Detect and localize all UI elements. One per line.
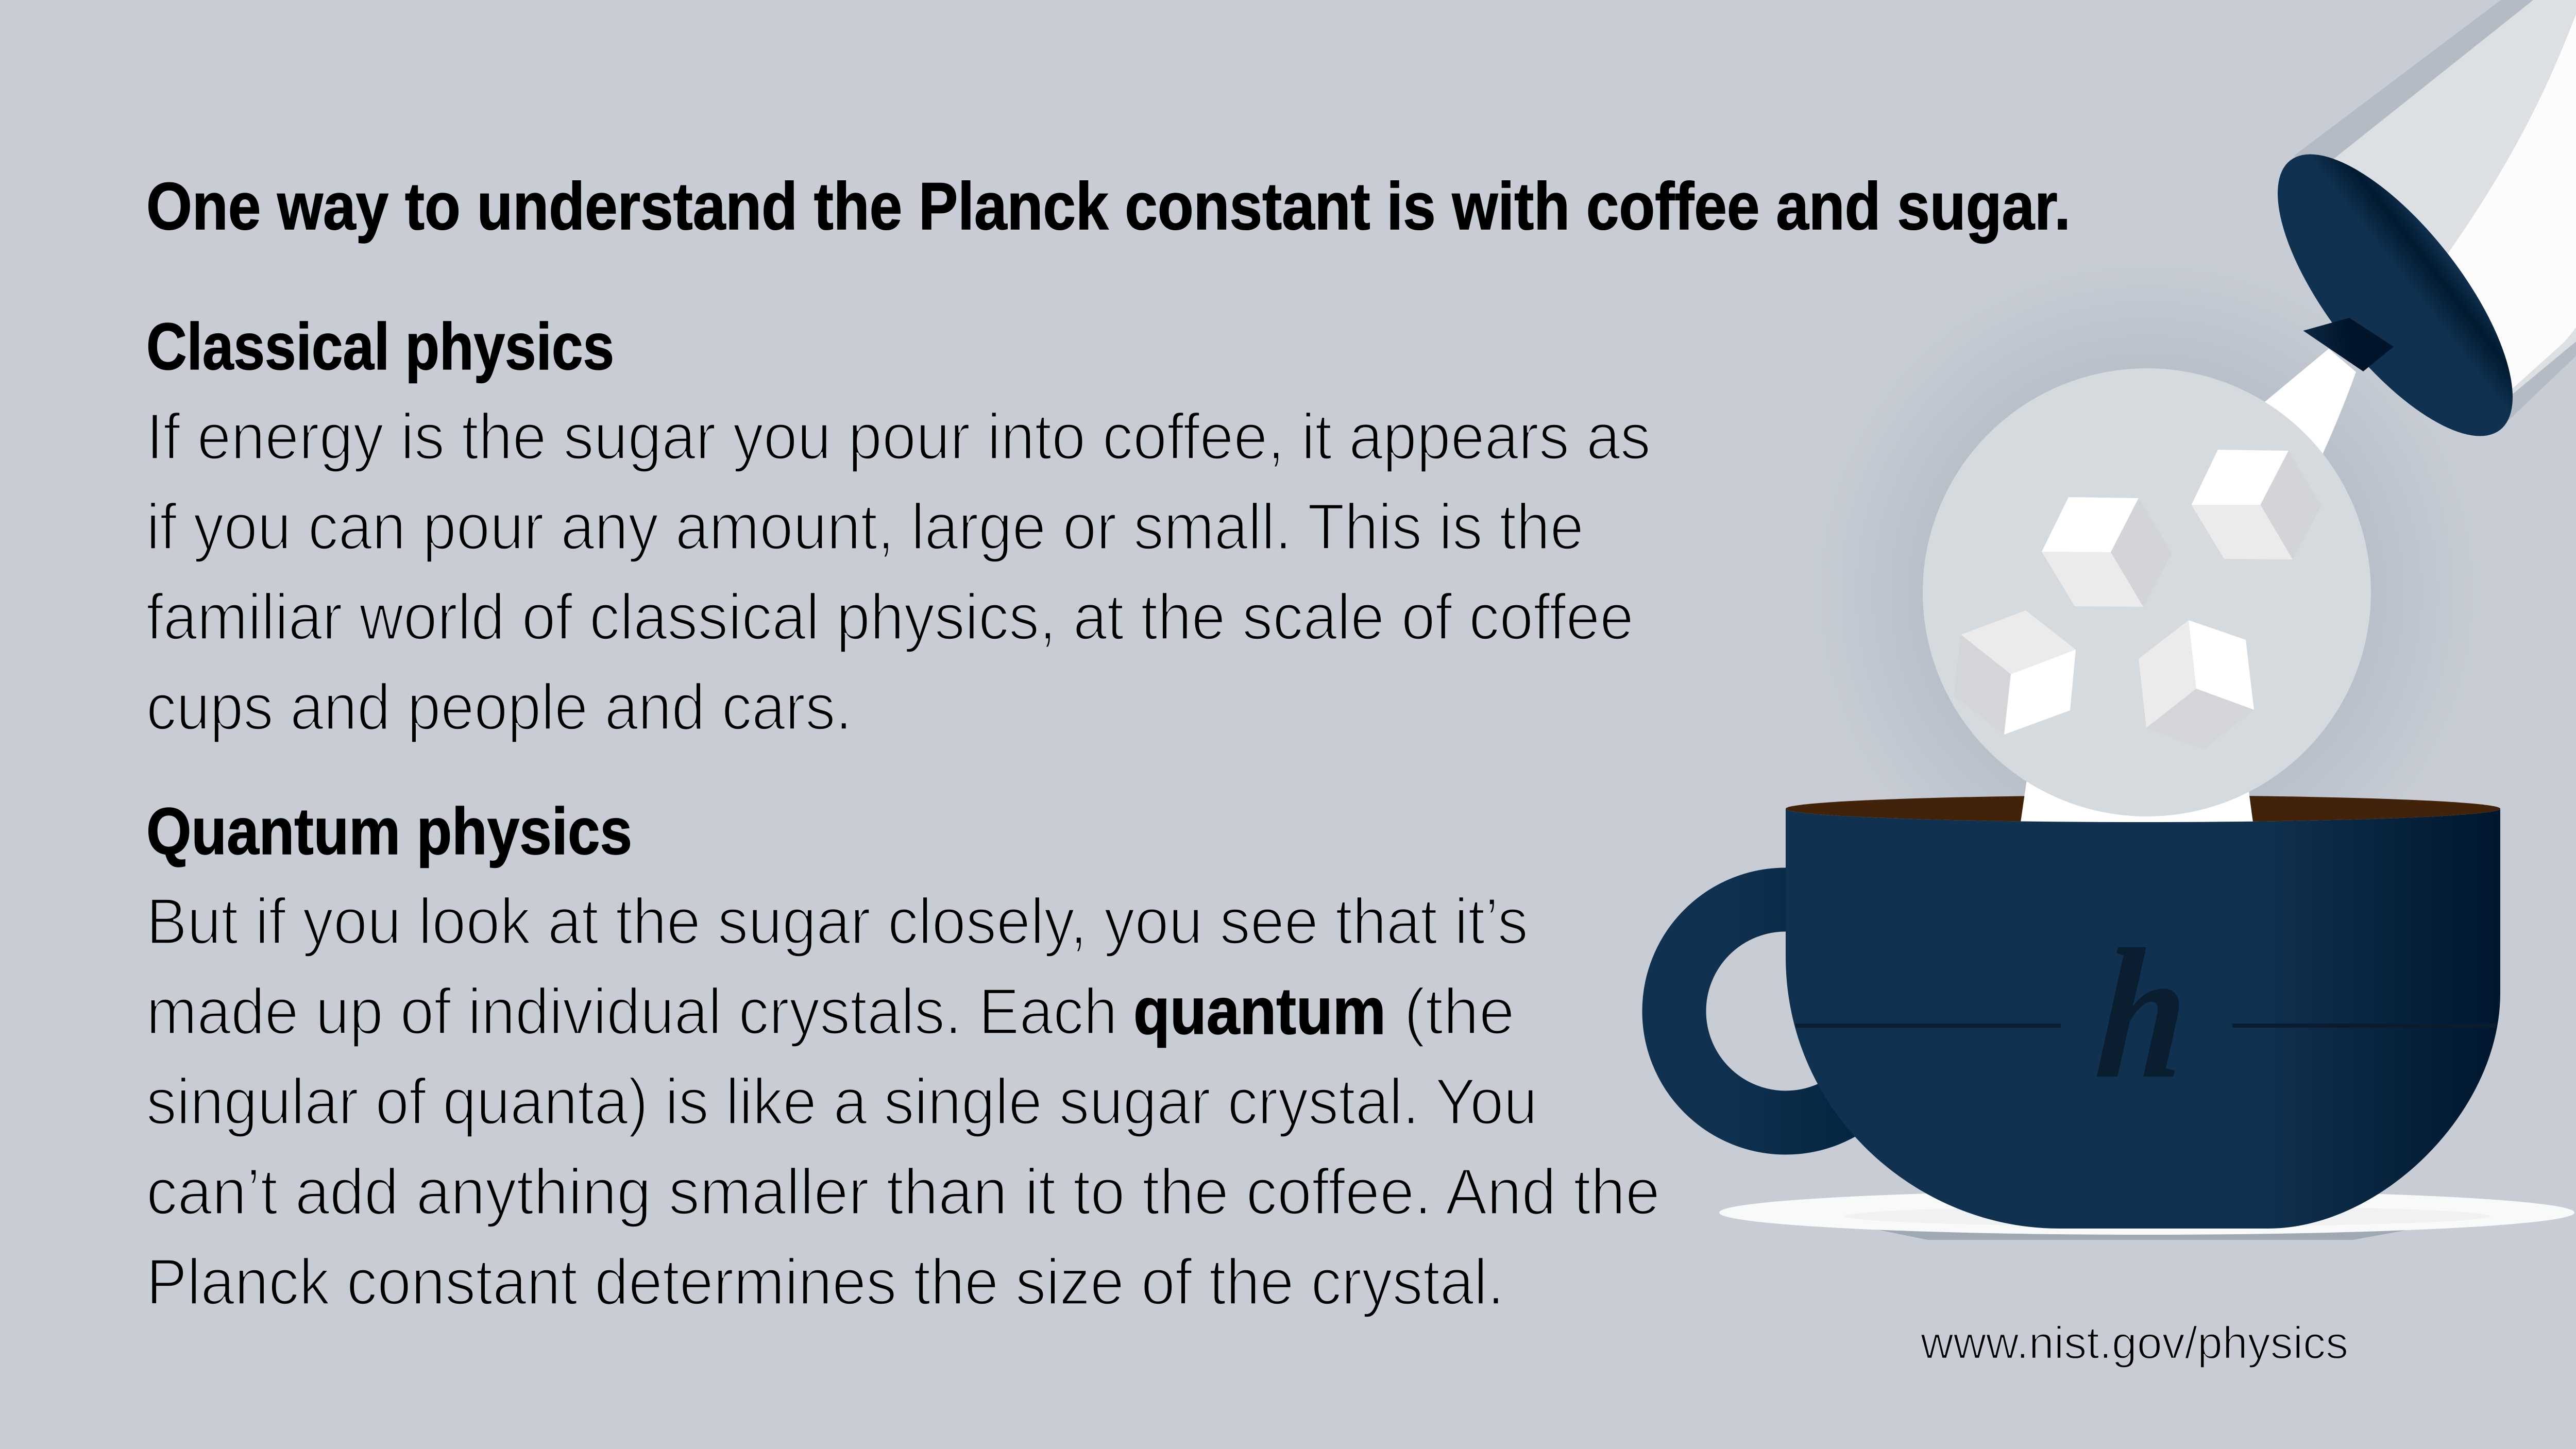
- cube front: [2042, 552, 2143, 607]
- icon: coffee cup: [1674, 773, 2500, 1229]
- saucer plate: [1719, 1190, 2574, 1235]
- body line 5: Planck constant determines the size of the crystal.: [146, 1246, 1504, 1318]
- body line 2 start: made up of individual crystals. Each: [146, 975, 1117, 1048]
- cup line right: [2232, 1024, 2496, 1028]
- cube left: [2139, 620, 2196, 728]
- sugar circle: [1923, 368, 2371, 816]
- icon: sugar pour stream: [2164, 349, 2356, 567]
- saucer shadow: [1872, 1229, 2415, 1240]
- pourer shadow side: [2294, 0, 2576, 421]
- body line 4: can’t add anything smaller than it to the coffee. And the: [146, 1155, 1660, 1228]
- pourer spout: [2303, 318, 2394, 371]
- soft glow behind sugar circle: [1807, 252, 2487, 932]
- pourer highlight: [2421, 14, 2576, 388]
- body line 4: cups and people and cars.: [146, 671, 852, 743]
- url: www.nist.gov/physics: [1920, 1317, 2348, 1368]
- title: One way to understand the Planck constant is with coffee and sugar.: [146, 168, 2071, 244]
- cube front: [2192, 505, 2293, 559]
- cube right: [2189, 620, 2254, 710]
- heading: quantum physics: Quantum physics: [146, 795, 632, 868]
- pourer body: [2333, 0, 2576, 394]
- icon: sugar cube bottom left: [1954, 610, 2076, 735]
- body line 2: if you can pour any amount, large or small. This is the: [146, 490, 1584, 563]
- icon: sugar cube bottom right: [2139, 620, 2254, 749]
- pourer lid: [2238, 120, 2553, 471]
- text block: quantum physics: [146, 795, 1660, 1318]
- cup body: [1786, 809, 2500, 1229]
- text block: classical physics: [146, 310, 1651, 743]
- bold word: quantum: quantum: [1133, 975, 1386, 1048]
- body line 3: singular of quanta) is like a single sugar crystal. You: [146, 1065, 1537, 1138]
- icon: sugar cube top left: [2042, 497, 2172, 607]
- cube front: [2004, 650, 2076, 735]
- planck symbol h: h: [2091, 911, 2194, 1117]
- icon: sugar cube top right: [2192, 450, 2321, 559]
- icon: sugar pourer: [2238, 0, 2576, 471]
- cup handle: [1674, 899, 1897, 1123]
- saucer inner: [1845, 1206, 2490, 1226]
- cube side: [2261, 451, 2321, 559]
- cup line left: [1795, 1024, 2061, 1028]
- body line 3: familiar world of classical physics, at the scale of coffee: [146, 581, 1634, 653]
- sugar stream in coffee: [2021, 773, 2253, 822]
- icon: saucer: [1719, 1190, 2574, 1240]
- body line 1: If energy is the sugar you pour into coffee, it appears as: [146, 400, 1651, 473]
- cube side: [1954, 635, 2011, 735]
- coffee surface: [1786, 795, 2500, 822]
- body line 2 end: (the: [1404, 975, 1515, 1048]
- body line 1: But if you look at the sugar closely, you see that it’s: [146, 885, 1528, 958]
- cube top: [2042, 497, 2139, 552]
- cube bottom: [2146, 689, 2254, 749]
- cube side: [2111, 498, 2172, 607]
- cube top: [1961, 610, 2076, 674]
- heading: classical physics: Classical physics: [146, 310, 614, 384]
- cube top: [2192, 450, 2289, 505]
